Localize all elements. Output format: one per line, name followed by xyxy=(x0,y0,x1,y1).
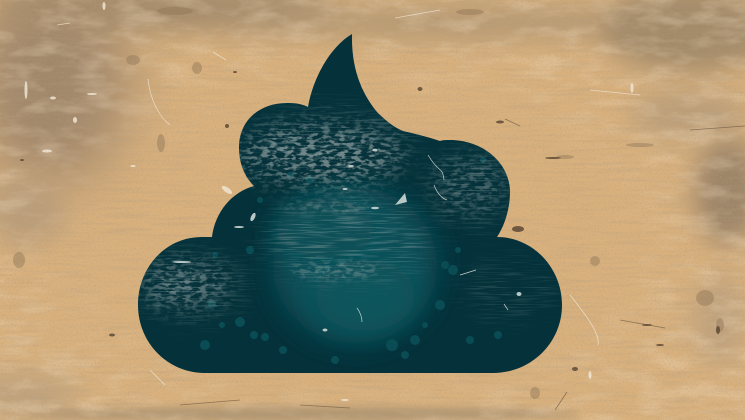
pale chips xyxy=(173,149,522,332)
grey weathered texture xyxy=(138,98,561,328)
poop silhouette xyxy=(130,30,570,380)
teal splatter glow xyxy=(200,157,502,364)
